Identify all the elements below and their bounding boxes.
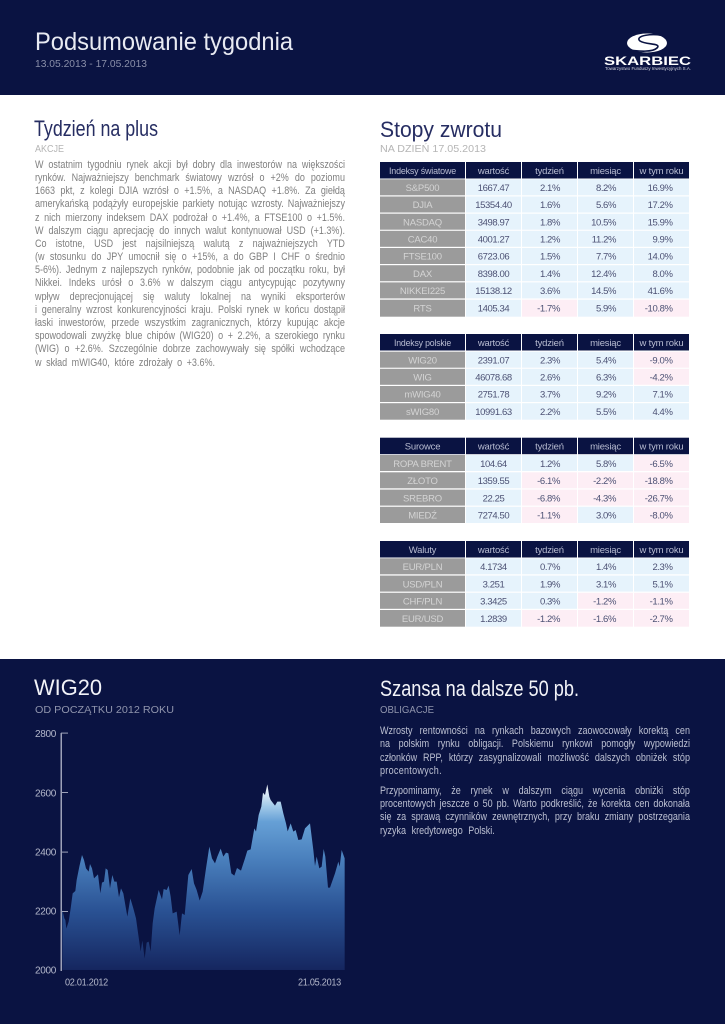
table: Polish indices: WIG20: [408, 355, 437, 366]
table: currencies: 3.1%: [596, 579, 617, 590]
commentary text: wpływ deprecjonującej się waluty lokalnej na wyniki eksporterów: [35, 291, 345, 303]
table: commodities: -6.8%: [537, 493, 561, 504]
x axis dates: 02.01.2012: [65, 978, 109, 988]
area series: [62, 784, 345, 970]
table: world indices: 2.1%: [540, 183, 561, 194]
report title: Podsumowanie tygodnia: [35, 28, 293, 56]
table: Polish indices: 2.2%: [540, 407, 561, 418]
table: commodities: 7274.50: [478, 510, 509, 522]
table: commodities: 1359.55: [478, 476, 509, 487]
table: commodities: 3.0%: [596, 510, 617, 522]
table: currencies: -1.2%: [593, 596, 617, 608]
table: commodities: 1.2%: [540, 459, 561, 470]
table: world indices: 14.0%: [648, 252, 673, 263]
table: world indices: 8.0%: [652, 269, 673, 280]
table: world indices: 12.4%: [591, 269, 617, 280]
table: world indices: 7.7%: [596, 252, 617, 263]
table: world indices: -1.7%: [537, 304, 561, 314]
table: world indices: 3498.97: [478, 217, 509, 228]
table: world indices: NASDAQ: [403, 217, 442, 228]
heading: WIG20: WIG20: [34, 675, 102, 700]
commentary text: W dalszym ciągu aprecjację do innych walut kontynuował USD (+1.3%).: [35, 225, 345, 237]
table: Polish indices: miesiąc: [590, 338, 621, 349]
subheading: AKCJE: AKCJE: [35, 143, 64, 155]
y axis: 2800: [35, 729, 57, 740]
table: world indices: 3.6%: [540, 286, 561, 297]
table: commodities: ZŁOTO: [407, 476, 438, 487]
table: currencies: EUR/PLN: [403, 562, 443, 573]
area chart: WIG20 index: [35, 729, 345, 988]
table: Polish indices: 2.6%: [540, 372, 561, 384]
table: Polish indices: 46078.68: [475, 372, 512, 384]
commentary text: (w stosunku do JPY umocnił się o +15%, a do GBP I CHF o średnio: [35, 251, 345, 263]
table: commodities: -6.5%: [650, 459, 673, 470]
table: Polish indices: 2391.07: [478, 355, 509, 366]
x axis dates: [65, 978, 342, 988]
table: Polish indices: 9.2%: [596, 390, 617, 401]
table: currencies: 5.1%: [652, 579, 673, 590]
table: Polish indices: 3.7%: [540, 390, 561, 401]
commentary text: w skład mWIG40, które zdrożały o +3.6%.: [35, 357, 215, 369]
table: Polish indices: 6.3%: [596, 372, 617, 384]
table: world indices: 1.4%: [540, 269, 561, 280]
y axis: [35, 729, 68, 976]
table: Polish indices: Indeksy polskie: [394, 338, 451, 349]
table: world indices: 16.9%: [648, 183, 673, 194]
table: world indices: 1667.47: [478, 183, 509, 194]
bonds text paragraph 2: procentowych jeszcze o 50 pb. Warto podkreślić, że korekta cen dokonała: [380, 798, 690, 810]
table: commodities: Surowce: [405, 442, 440, 453]
table: world indices: FTSE100: [403, 252, 442, 263]
table: Polish indices: mWIG40: [404, 390, 441, 401]
table: currencies: 3.251: [483, 579, 504, 590]
table: world indices: 15138.12: [475, 286, 512, 297]
table: world indices: 1.2%: [540, 234, 561, 246]
table: Polish indices: [380, 334, 689, 420]
table: currencies: EUR/USD: [402, 614, 444, 625]
commentary text: [35, 159, 345, 369]
table: world indices: 11.2%: [592, 234, 617, 246]
footer band: [0, 659, 725, 1024]
table: Polish indices: WIG: [413, 372, 432, 384]
commentary text: spowodowali zwyżkę blue chipów (WIG20) o + 2.2%, a szerokiego rynku: [35, 330, 345, 342]
table: Polish indices: 7.1%: [652, 390, 673, 401]
table: world indices: miesiąc: [590, 166, 621, 177]
bonds text paragraph 2: Przypominamy, że rynek w dalszym ciągu wycenia obniżki stóp: [380, 785, 690, 797]
commentary text: amerykańską podążyły europejskie parkiety notując wzrosty. Najważniejszy: [35, 198, 345, 210]
table: commodities: w tym roku: [639, 442, 683, 453]
table: Polish indices: -4.2%: [650, 372, 673, 384]
table: commodities: -26.7%: [645, 493, 673, 504]
table: world indices: 8.2%: [596, 183, 617, 194]
table: currencies: USD/PLN: [403, 579, 443, 590]
commentary text: Nikkei. Indeks urósł o 3.6% w dalszym ciągu antycypując pozytywny: [35, 277, 345, 289]
table: world indices: 8398.00: [478, 269, 509, 280]
table: currencies: w tym roku: [639, 545, 683, 556]
table: commodities: tydzień: [535, 442, 564, 453]
y axis: 2200: [35, 906, 57, 918]
panel: bonds heading: [380, 676, 579, 716]
table: currencies: -1.1%: [650, 596, 673, 608]
table: world indices: S&P500: [406, 183, 439, 194]
table: commodities: 22.25: [483, 493, 504, 504]
table: Polish indices: 10991.63: [475, 407, 512, 418]
header band: [0, 0, 725, 95]
table: currencies: 0.7%: [540, 562, 561, 573]
subheading: since start of 2012: OD POCZĄTKU 2012 ROKU: [35, 704, 174, 716]
table: currencies: wartość: [477, 545, 510, 556]
table: currencies: 3.3425: [480, 596, 507, 608]
table: world indices: 1.5%: [540, 252, 561, 263]
table: world indices: RTS: [413, 304, 432, 314]
logo: Skarbiec: SKARBIEC: [604, 56, 691, 68]
table: world indices: 10.5%: [591, 217, 617, 228]
table: Polish indices: tydzień: [535, 338, 564, 349]
table: currencies: 4.1734: [480, 562, 507, 573]
commentary text: rynków. Najważniejszy benchmark światowy wzrósł o +2% do poziomu: [35, 172, 345, 184]
table: Polish indices: sWIG80: [406, 407, 439, 418]
table: currencies: 1.9%: [540, 579, 561, 590]
table: commodities: -6.1%: [537, 476, 561, 487]
table: world indices: 41.6%: [648, 286, 673, 297]
logo: Skarbiec: [604, 34, 691, 71]
commentary text: 5-6%). Jednym z najlepszych rynków, podobnie jak od początku roku, był: [35, 264, 345, 276]
heading: Szansa na dalsze 50 pb.: Szansa na dalsze 50 pb.: [380, 676, 579, 701]
bonds text paragraph 1: [380, 725, 690, 777]
subheading: date: NA DZIEŃ 17.05.2013: [380, 142, 486, 155]
table: currencies: 1.4%: [596, 562, 617, 573]
commentary text: Co istotne, USD jest najsilniejszą walutą z najważniejszych YTD: [35, 238, 345, 250]
table: world indices: 6723.06: [478, 252, 509, 263]
logo: Skarbiec: Towarzystwo Funduszy Inwestycyjnych S.A.: [605, 66, 691, 71]
table: commodities: [380, 438, 689, 523]
table: commodities: -1.1%: [537, 510, 561, 522]
table: commodities: -8.0%: [650, 510, 673, 522]
table: world indices: 9.9%: [652, 234, 673, 246]
commentary text: W ostatnim tygodniu rynek akcji był dobry dla inwestorów na większości: [35, 159, 345, 171]
table: commodities: miesiąc: [590, 442, 621, 453]
table: currencies: 1.2839: [480, 614, 507, 625]
table: world indices: tydzień: [535, 166, 564, 177]
table: currencies: Waluty: [409, 545, 437, 556]
table: commodities: MIEDŹ: [408, 510, 437, 522]
table: currencies: 0.3%: [540, 596, 561, 608]
table: commodities: -2.2%: [593, 476, 617, 487]
table: currencies: 2.3%: [652, 562, 673, 573]
table: world indices: 17.2%: [648, 200, 673, 211]
table: Polish indices: 2751.78: [478, 390, 509, 401]
bonds text paragraph 1: Wzrosty rentowności na rynkach bazowych zaowocowały korektą cen: [380, 725, 690, 737]
bonds text paragraph 1: na polskim rynku obligacji. Polskiemu rynkowi pomogły wypowiedzi: [380, 738, 690, 750]
table: world indices: -10.8%: [645, 304, 673, 314]
commentary text: łaski inwestorów, przede wszystkim zagranicznych, którzy kupując akcje: [35, 317, 345, 329]
panel: WIG20 chart: [34, 675, 345, 988]
table: currencies: -2.7%: [650, 614, 673, 625]
table: commodities: ROPA BRENT: [393, 459, 452, 470]
table: currencies: -1.2%: [537, 614, 561, 625]
bonds text paragraph 2: ryzyka kredytowego Polski.: [380, 825, 495, 837]
table: world indices: DJIA: [413, 200, 433, 211]
panel: weekly commentary heading: [34, 116, 158, 155]
y axis: 2400: [35, 848, 57, 858]
table: commodities: 5.8%: [596, 459, 617, 470]
commentary text: 1663 pkt, z kolegi DJIA wzrósł o +1.5%, a NASDAQ +1.8%. Za giełdą: [35, 185, 345, 197]
bonds text paragraph 1: procentowych.: [380, 765, 442, 777]
commentary text: z nich mierzony indeksem DAX podrożał o +1.4%, a FTSE100 o +1.5%.: [35, 212, 345, 224]
table: commodities: -4.3%: [593, 493, 617, 504]
table: commodities: 104.64: [480, 459, 507, 470]
table: world indices: 1405.34: [478, 304, 509, 314]
commentary text: (WIG) o +2.6%. Szczególnie dobrze zachowywały się spółki wchodzące: [35, 343, 345, 355]
table: Polish indices: wartość: [477, 338, 510, 349]
y axis: 2000: [35, 966, 57, 976]
table: currencies: CHF/PLN: [403, 596, 442, 608]
table: world indices: 14.5%: [591, 286, 617, 297]
table: world indices: 5.9%: [596, 304, 617, 314]
table: Polish indices: w tym roku: [639, 338, 683, 349]
table: Polish indices: 5.4%: [596, 355, 617, 366]
bonds text paragraph 2: się za sprawą czynników zewnętrznych, przy braku zmiany postrzegania: [380, 811, 690, 823]
table: world indices: 15354.40: [475, 200, 512, 211]
table: world indices: CAC40: [408, 234, 437, 246]
table: currencies: miesiąc: [590, 545, 621, 556]
table: world indices: Indeksy światowe: [389, 166, 456, 177]
y axis: 2600: [35, 788, 57, 800]
bonds text paragraph 1: członków RPP, którzy zasygnalizowali możliwość dalszych obniżek stóp: [380, 752, 690, 764]
table: commodities: -18.8%: [645, 476, 673, 487]
commentary text: i generalny wzrost konkurencyjności kraju. Polski rynek w końcu dostąpił: [35, 304, 345, 316]
bonds text paragraph 2: [380, 785, 690, 837]
table: world indices: 4001.27: [478, 234, 509, 246]
table: Polish indices: 4.4%: [652, 407, 673, 418]
subheading: OBLIGACJE: OBLIGACJE: [380, 704, 434, 716]
table: world indices: w tym roku: [639, 166, 683, 177]
x axis dates: 21.05.2013: [298, 978, 342, 988]
panel: rates of return: [380, 117, 689, 627]
table: world indices: wartość: [477, 166, 510, 177]
table: Polish indices: -9.0%: [650, 355, 673, 366]
table: world indices: 1.6%: [540, 200, 561, 211]
table: world indices: 5.6%: [596, 200, 617, 211]
heading: Stopy zwrotu: Stopy zwrotu: [380, 117, 502, 142]
table: commodities: SREBRO: [403, 493, 442, 504]
table: world indices: 15.9%: [648, 217, 673, 228]
table: world indices: [380, 162, 689, 317]
table: Polish indices: 2.3%: [540, 355, 561, 366]
table: world indices: NIKKEI225: [400, 286, 445, 297]
report date range: 13.05.2013 - 17.05.2013: [35, 58, 147, 70]
table: commodities: wartość: [477, 442, 510, 453]
table: world indices: 1.8%: [540, 217, 561, 228]
table: Polish indices: 5.5%: [596, 407, 617, 418]
table: currencies: tydzień: [535, 545, 564, 556]
table: currencies: -1.6%: [593, 614, 617, 625]
table: world indices: DAX: [413, 269, 433, 280]
table: currencies: [380, 541, 689, 627]
heading: Tydzień na plus: Tydzień na plus: [34, 116, 158, 141]
